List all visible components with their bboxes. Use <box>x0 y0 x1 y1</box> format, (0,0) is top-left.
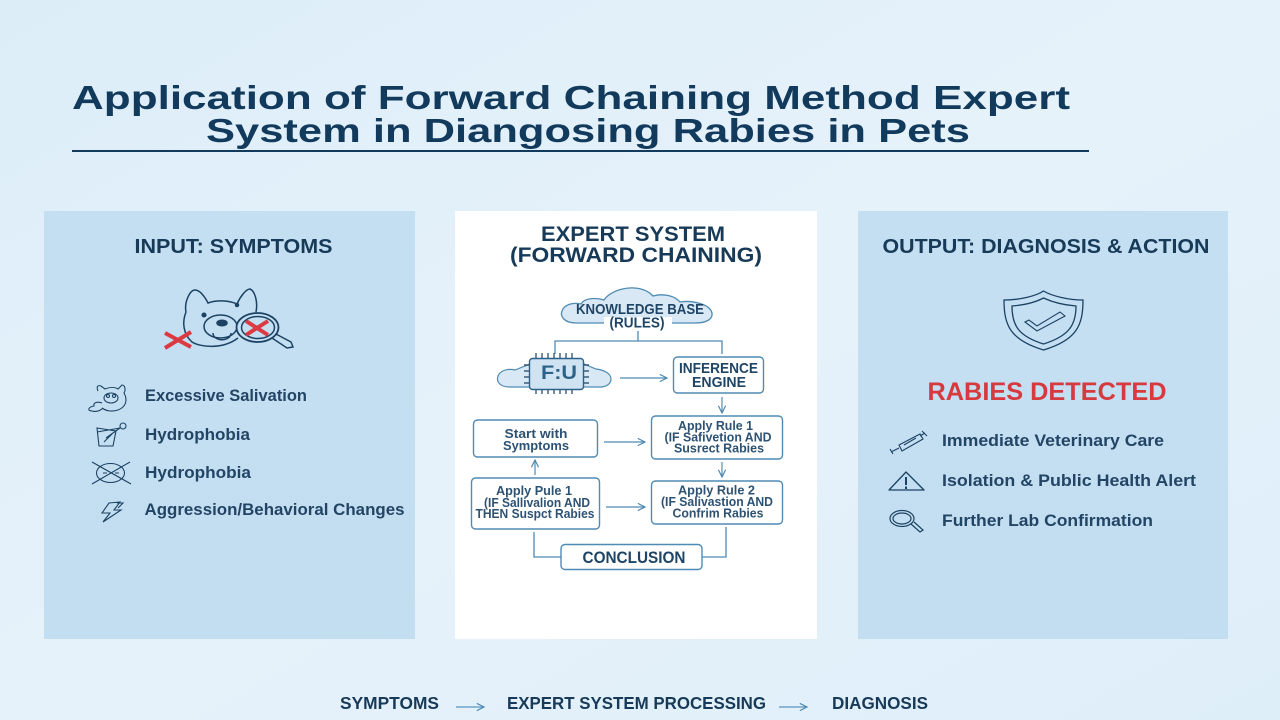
box: start with symptoms <box>474 420 598 457</box>
heading: output: OUTPUT: DIAGNOSIS & ACTION <box>882 236 1210 258</box>
box: conclusion: CONCLUSION <box>582 549 686 567</box>
label: veterinary care: Immediate Veterinary Care <box>942 432 1164 450</box>
box: apply rule 2: Confrim Rabies <box>672 506 764 520</box>
icon: lightning <box>102 502 123 522</box>
arrow: chip to engine <box>620 377 667 379</box>
footer flow <box>340 693 928 713</box>
heading: expert system <box>510 222 762 267</box>
icon: warning triangle <box>889 472 924 490</box>
arrow: rule 1 to rule 2 <box>721 462 723 477</box>
box: apply rule 1: Apply Rule 1 <box>678 419 753 433</box>
box: start with symptoms: Symptoms <box>503 439 569 453</box>
label: aggression: Aggression/Behavioral Changes <box>144 501 404 519</box>
label: hydrophobia second: Hydrophobia <box>145 464 252 482</box>
box: apply rule 1: (IF Safivetion AND <box>664 430 772 444</box>
icon: red cross left <box>165 332 191 348</box>
box: apply rule 2: Apply Rule 2 <box>678 484 755 498</box>
arrow: apply pule up to start <box>534 460 536 475</box>
icon: dog with magnifying glass <box>184 289 293 348</box>
icon: crossed circle <box>92 462 131 484</box>
arrow: start to rule 1 <box>604 441 645 443</box>
footer flow: EXPERT SYSTEM PROCESSING <box>507 693 766 713</box>
box: inference engine <box>674 357 764 393</box>
box: apply pule 1: (IF Sallivalion AND <box>484 496 590 510</box>
box: apply rule 1: Susrect Rabies <box>674 442 764 456</box>
title <box>72 79 1070 149</box>
icon: salivating dog <box>89 385 126 411</box>
cloud: knowledge base <box>562 288 712 332</box>
label: isolation: Isolation & Public Health Alert <box>942 472 1197 490</box>
status: rabies detected: RABIES DETECTED <box>928 378 1166 406</box>
footer flow: SYMPTOMS <box>340 693 439 713</box>
heading: expert system: EXPERT SYSTEM <box>541 222 725 246</box>
panel: expert system <box>455 211 817 639</box>
title: System in Diangosing Rabies in Pets <box>206 112 970 149</box>
label: excessive salivation: Excessive Salivation <box>145 387 307 405</box>
icon: cloud chip <box>498 353 611 394</box>
cloud: knowledge base: (RULES) <box>610 314 665 332</box>
box: inference engine: INFERENCE <box>679 360 758 377</box>
heading: input symptoms: INPUT: SYMPTOMS <box>134 236 332 258</box>
box: apply rule 2: (IF Salivastion AND <box>661 495 773 509</box>
arrow: apply pule to rule 2 <box>606 506 645 508</box>
footer flow: DIAGNOSIS <box>832 693 928 713</box>
icon: magnifier <box>890 510 923 532</box>
box: apply pule 1 <box>472 478 600 529</box>
icon: cloud chip: F:U <box>541 363 577 384</box>
box: apply pule 1: THEN Suspct Rabies <box>476 507 595 521</box>
icon: water cup <box>97 423 126 446</box>
arrow: footer second <box>779 706 807 708</box>
icon: shield <box>1004 291 1083 350</box>
cloud: knowledge base: KNOWLEDGE BASE <box>576 301 704 318</box>
icon: syringe <box>890 431 927 454</box>
panel: input symptoms <box>44 211 415 639</box>
box: apply rule 2 <box>652 481 782 524</box>
box: start with symptoms: Start with <box>504 427 568 441</box>
box: apply pule 1: Apply Pule 1 <box>496 484 572 498</box>
arrow: engine to rule 1 <box>721 397 723 413</box>
heading: expert system: (FORWARD CHAINING) <box>510 243 762 267</box>
connector: boxes to conclusion <box>534 527 726 557</box>
title: Application of Forward Chaining Method Expert <box>72 79 1070 116</box>
panel: output diagnosis and action <box>858 211 1228 639</box>
title underline <box>72 150 1089 152</box>
label: hydrophobia: Hydrophobia <box>145 426 251 444</box>
label: lab confirmation: Further Lab Confirmation <box>942 512 1153 530</box>
box: conclusion <box>561 544 702 570</box>
box: apply rule 1 <box>652 416 782 459</box>
box: inference engine: ENGINE <box>692 374 746 391</box>
arrow: footer first <box>456 706 484 708</box>
connector: knowledge base to chip and engine <box>555 331 722 354</box>
icon: red cross in lens <box>246 321 268 335</box>
